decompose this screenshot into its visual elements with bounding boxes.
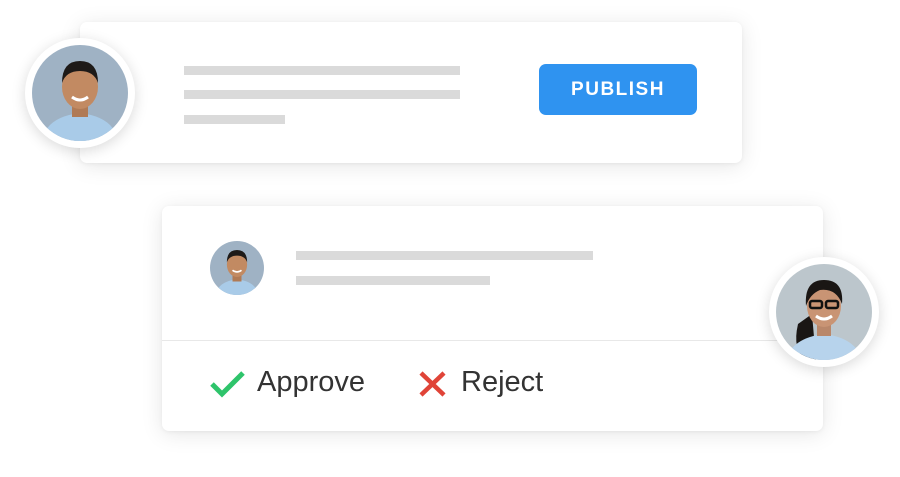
small avatar: [210, 241, 264, 295]
approve action: [210, 366, 365, 398]
publish button: [539, 64, 697, 115]
reject action: [420, 366, 543, 398]
publish button: PUBLISH: [571, 79, 665, 100]
reject action: Reject: [461, 366, 543, 398]
card: publish: [80, 22, 742, 163]
avatar: woman (approver): [769, 257, 879, 367]
card: approval: [162, 206, 823, 431]
avatar: man (publisher): [25, 38, 135, 148]
text placeholder lines: [184, 66, 460, 124]
approve action: Approve: [257, 366, 365, 398]
comment placeholder lines: [296, 251, 593, 285]
